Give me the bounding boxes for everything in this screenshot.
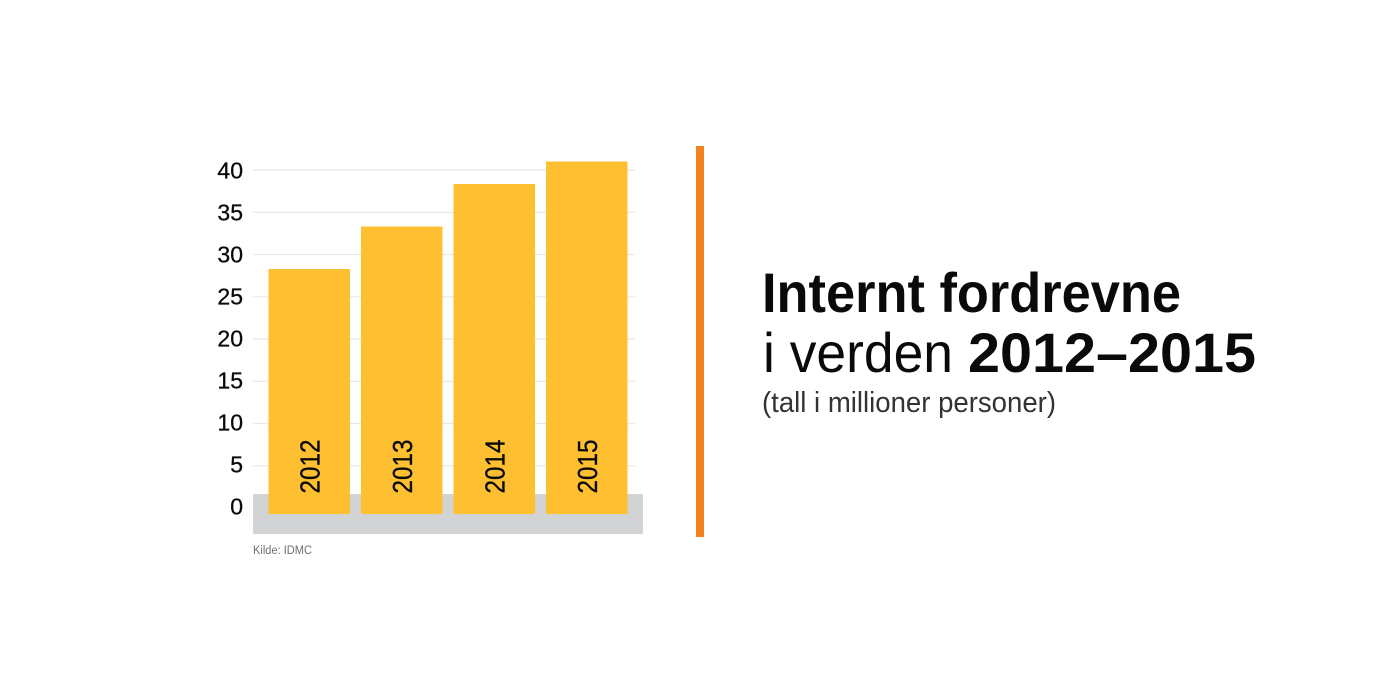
bar label: 2013: 2013 bbox=[387, 440, 418, 494]
bar: 2014 bbox=[454, 184, 535, 514]
title line 1: Internt fordrevne bbox=[762, 261, 1181, 324]
bar label: 2012: 2012 bbox=[294, 440, 326, 494]
source note: Kilde: IDMC bbox=[253, 545, 312, 557]
grey baseline band bbox=[253, 494, 643, 534]
bar label: 2014: 2014 bbox=[480, 440, 510, 494]
y axis labels: 30 bbox=[217, 242, 243, 268]
y axis labels: 0 bbox=[230, 494, 243, 520]
y axis labels: 5 bbox=[230, 452, 243, 478]
title bbox=[762, 261, 1256, 384]
y axis labels: 20 bbox=[217, 326, 243, 352]
bar chart bbox=[217, 158, 643, 534]
title line 2: regular part: i verden bbox=[763, 321, 953, 384]
y axis labels bbox=[217, 158, 243, 520]
y axis labels: 25 bbox=[217, 284, 243, 310]
y axis labels: 40 bbox=[217, 158, 243, 184]
subtitle: (tall i millioner personer) bbox=[762, 387, 1056, 419]
title line 2: bold years: 2012–2015 bbox=[968, 321, 1256, 384]
orange divider bar bbox=[696, 146, 704, 537]
y axis labels: 35 bbox=[217, 200, 243, 226]
bar: 2013 bbox=[361, 226, 442, 514]
y axis labels: 10 bbox=[217, 410, 243, 436]
bar: 2015 bbox=[546, 162, 628, 514]
y axis labels: 15 bbox=[217, 368, 243, 394]
bar: 2012 bbox=[268, 269, 350, 514]
bar label: 2015: 2015 bbox=[572, 440, 603, 494]
